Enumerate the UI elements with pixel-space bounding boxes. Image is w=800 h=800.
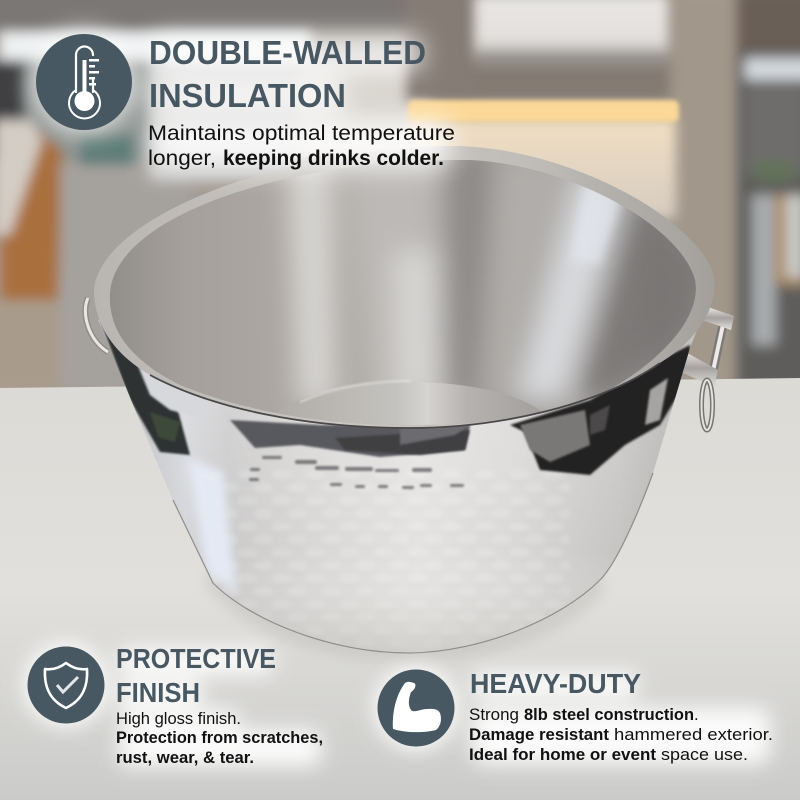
front rim edge — [150, 363, 660, 428]
description: construction: Strong — [469, 706, 519, 724]
heading: double-walled insulation: DOUBLE-WALLED — [149, 34, 426, 71]
blue highlight — [187, 457, 237, 593]
bowl shadow on table — [205, 570, 605, 662]
left handle — [85, 298, 108, 352]
description: temperature: longer, — [148, 147, 216, 170]
description: construction: 8lb steel construction — [524, 706, 694, 724]
front dark reflection — [230, 420, 470, 457]
sharp top highlight — [570, 180, 622, 265]
hammered outer wall — [98, 320, 697, 646]
top feature: insulation — [36, 34, 461, 170]
icon: shield — [28, 646, 104, 724]
table surface — [0, 378, 800, 800]
description: construction: Damage resistant — [469, 726, 610, 744]
interior floor — [302, 382, 540, 425]
description: construction: space use. — [661, 746, 748, 764]
right handle — [672, 306, 734, 430]
description: protection: Protection from scratches, — [116, 729, 323, 747]
right dark reflection — [510, 345, 690, 475]
white glow behind bottom right text — [374, 666, 770, 764]
dent shadow dashes — [249, 456, 464, 489]
description: construction: Ideal for home or event — [469, 746, 657, 764]
heading: protective finish: PROTECTIVE — [116, 643, 276, 674]
blurred room background — [0, 0, 800, 400]
heading: protective finish: FINISH — [116, 677, 200, 708]
white glow behind top text — [34, 32, 450, 168]
heading: double-walled insulation: INSULATION — [149, 77, 346, 114]
description: protection: rust, wear, & tear. — [116, 749, 254, 767]
feature: heavy-duty — [378, 668, 778, 764]
white glow behind bottom left text — [24, 643, 321, 766]
description: construction: . — [694, 706, 699, 724]
icon: flexed arm — [378, 670, 454, 746]
feature: protective finish — [28, 643, 328, 767]
heading: heavy-duty: HEAVY-DUTY — [470, 668, 641, 699]
description: temperature: keeping drinks colder. — [223, 147, 444, 170]
steel bucket — [85, 146, 734, 660]
interior — [110, 160, 696, 425]
left dark reflection — [100, 320, 190, 455]
description: protection: High gloss finish. — [116, 710, 241, 728]
icon: thermometer — [36, 34, 132, 130]
description: construction: hammered exterior. — [614, 726, 773, 744]
description: temperature: Maintains optimal temperature — [148, 122, 455, 145]
body bottom edge — [173, 473, 653, 653]
outer rim — [94, 146, 715, 428]
